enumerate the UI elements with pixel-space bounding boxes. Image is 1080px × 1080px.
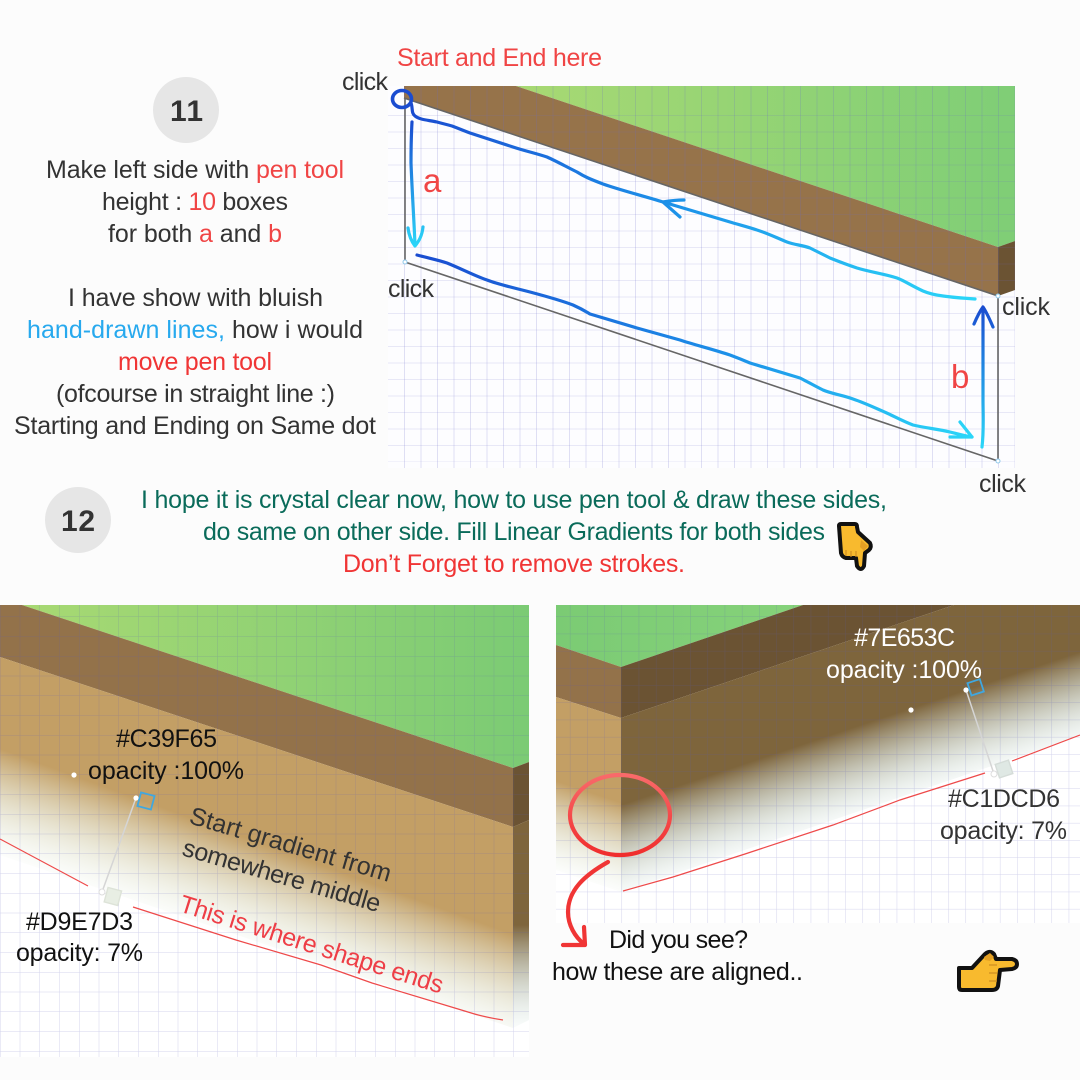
- step 11 number badge: [153, 77, 219, 143]
- step 11 instructions: (ofcourse in straight line :): [56, 380, 335, 408]
- hand-drawn arrow b: [974, 307, 993, 447]
- label: 7E653C colour stop: #7E653C: [854, 624, 955, 652]
- note: did you see: how these are aligned..: [552, 958, 803, 986]
- shape end line: [623, 735, 1080, 891]
- step 12 instructions: do same on other side. Fill Linear Gradients for both sides: [203, 518, 825, 546]
- click labels: click: [1002, 293, 1050, 321]
- label: side a: a: [423, 162, 442, 199]
- step 11 instructions: [14, 156, 376, 440]
- hand-drawn blue line: lower edge with arrow: [417, 255, 972, 437]
- icon: hand pointing right: [959, 952, 1017, 990]
- label: 7E653C colour stop: [826, 624, 982, 684]
- note: did you see: Did you see?: [609, 926, 748, 954]
- label: C1DCD6 colour stop: opacity: 7%: [940, 817, 1067, 845]
- step 11 number badge: 11: [170, 95, 203, 128]
- arrow: curved red arrow: [563, 862, 608, 945]
- click labels: [342, 68, 1050, 498]
- icon: hand pointing down: [839, 524, 871, 569]
- step 12 number badge: 12: [61, 505, 95, 538]
- step 11 instructions: Make left side with pen tool: [46, 156, 344, 184]
- click labels: click: [342, 68, 388, 96]
- note: did you see: [552, 926, 803, 986]
- step 12 instructions: Don’t Forget to remove strokes.: [343, 550, 685, 578]
- gradient handle: right panel: [908, 679, 1013, 778]
- step 12 number badge: [45, 487, 111, 553]
- label: C1DCD6 colour stop: #C1DCD6: [948, 785, 1060, 813]
- panel: left side gradient: [0, 605, 529, 1057]
- step 11 instructions: for both a and b: [108, 220, 282, 248]
- panel: right side gradient: [556, 605, 1080, 923]
- label: shape end note: This is where shape ends: [176, 890, 447, 999]
- label: side b: b: [951, 358, 969, 395]
- shape end line: [0, 839, 503, 1020]
- step 12 instructions: [141, 486, 887, 578]
- step 11 instructions: hand-drawn lines, how i would: [27, 316, 363, 344]
- gradient handle: left panel: [71, 772, 155, 906]
- label: D9E7D3 colour stop: #D9E7D3: [26, 908, 133, 936]
- callout: red circle around alignment: [570, 775, 670, 855]
- top isometric diagram: pen tool sides: [388, 86, 1015, 468]
- step 11 instructions: height : 10 boxes: [102, 188, 288, 216]
- label: D9E7D3 colour stop: opacity: 7%: [16, 939, 143, 967]
- label: start and end here: Start and End here: [397, 44, 602, 72]
- label: D9E7D3 colour stop: [16, 908, 143, 967]
- label: C39F65 colour stop: #C39F65: [116, 725, 217, 753]
- label: C39F65 colour stop: [88, 725, 244, 785]
- label: C1DCD6 colour stop: [940, 785, 1067, 845]
- hand-drawn arrow a: [408, 122, 423, 246]
- label: start gradient note: Start gradient from: [186, 802, 395, 888]
- click labels: click: [979, 470, 1026, 498]
- label: 7E653C colour stop: opacity :100%: [826, 656, 982, 684]
- hand-drawn blue line: upper edge with arrow and start loop: [411, 103, 975, 299]
- label: C39F65 colour stop: opacity :100%: [88, 757, 244, 785]
- step 12 instructions: I hope it is crystal clear now, how to use pen tool & draw these sides,: [141, 486, 887, 514]
- step 11 instructions: move pen tool: [118, 348, 272, 376]
- step 11 instructions: Starting and Ending on Same dot: [14, 412, 376, 440]
- label: start gradient note: somewhere middle: [179, 834, 384, 918]
- step 11 instructions: I have show with bluish: [68, 284, 323, 312]
- start and end loop: [392, 90, 412, 108]
- click labels: click: [388, 275, 434, 303]
